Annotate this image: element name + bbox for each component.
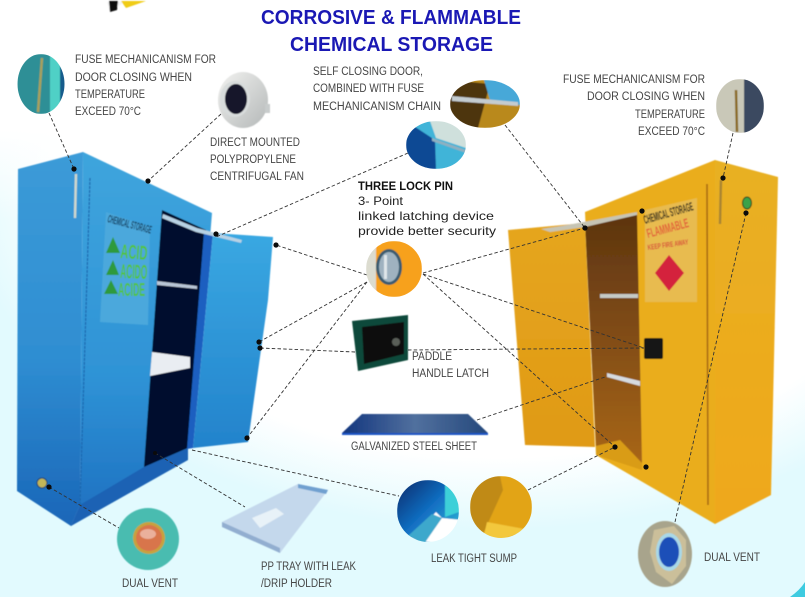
blue cabinet side [17,152,83,526]
icon: right fuse closeup [716,79,764,133]
text: right fuse mechanism: FUSE MECHANICANISM FOR [563,74,705,86]
yellow flammable cabinet [508,160,778,524]
text: pp tray: PP TRAY WITH LEAK [261,561,356,573]
icon: pp tray [222,484,328,553]
blue cabinet front [71,152,212,526]
text: fan [210,137,304,183]
icon: left dual vent [117,508,179,570]
flammable label [642,198,697,302]
text: three lock pin: 3- Point [358,194,404,208]
blue cabinet vent [37,478,47,488]
text: fan: POLYPROPYLENE [210,154,296,166]
yellow cabinet vent [742,197,752,209]
blue white shelf [150,352,190,376]
yellow sump floor [596,440,642,470]
text: self closing door: MECHANICANISM CHAIN [313,101,441,113]
text: paddle handle latch: HANDLE LATCH [412,368,489,380]
text: pp tray [261,561,356,590]
text: self closing door: COMBINED WITH FUSE [313,83,424,95]
paddle latch on yellow cabinet [644,338,663,359]
text: fan: DIRECT MOUNTED [210,137,300,149]
yellow fuse chain [720,180,721,224]
yellow closer arm [541,212,637,232]
text: paddle handle latch [412,351,489,380]
text: three lock pin: provide better security [358,224,496,238]
blue open door [193,233,273,448]
text: three lock pin: THREE LOCK PIN [358,179,453,193]
icon: galvanized steel sheet [342,414,488,435]
icon: yellow door closer closeup [450,80,520,128]
yellow open door [508,223,595,447]
yellow shelf [600,294,638,298]
text: right fuse mechanism: EXCEED 70°C [638,126,705,138]
blue door jamb [187,232,213,449]
text: self closing door: SELF CLOSING DOOR, [313,66,423,78]
blue door closer arm [162,214,242,243]
blue top shelf [157,281,197,289]
acid label: ACID [120,241,148,265]
text: three lock pin [358,179,496,238]
flammable label: FLAMMABLE [645,215,690,241]
text: left fuse mechanism: TEMPERATURE [75,89,145,101]
text: right fuse mechanism: DOOR CLOSING WHEN [587,91,705,103]
yellow lower shelf [607,373,640,386]
blue corrosive cabinet [17,152,273,526]
icon: right dual vent [638,521,692,587]
blue cabinet interior [144,210,206,467]
text: fan: CENTRIFUGAL FAN [210,171,304,183]
text: left fuse mechanism: EXCEED 70°C [75,106,141,118]
title [261,7,521,56]
yellow door seam [707,184,708,505]
text: paddle handle latch: PADDLE [412,351,452,363]
text: right fuse mechanism [563,74,705,138]
text: right dual vent: DUAL VENT [704,552,760,564]
acid label: ACIDO [120,261,148,284]
acid label [100,212,153,325]
text: pp tray: /DRIP HOLDER [261,578,332,590]
text: self closing door [313,66,441,113]
text: left fuse mechanism: FUSE MECHANICANISM FOR [75,54,216,66]
yellow cabinet side [715,160,778,524]
icon: blue door closer closeup [406,121,466,169]
cropped product at top edge [107,1,146,12]
yellow cabinet front [585,160,715,524]
icon: paddle handle latch [352,315,408,371]
text: left fuse mechanism: DOOR CLOSING WHEN [75,72,192,84]
text: right fuse mechanism: TEMPERATURE [635,109,705,121]
leader dots [46,166,749,490]
leader lines [49,113,746,528]
icon: left fuse closeup [17,54,66,114]
text: left dual vent: DUAL VENT [122,578,178,590]
door seam [80,178,90,505]
text: leak tight sump: LEAK TIGHT SUMP [431,553,517,565]
blue side fuse chain [75,174,76,218]
text: left fuse mechanism [75,54,216,118]
acid label: ACIDE [118,280,145,300]
icon: centrifugal fan [218,72,270,128]
blue cabinet plinth [71,448,188,526]
blue corrosive cabinet: CHEMICAL STORAGE [106,213,153,237]
yellow flammable cabinet: CHEMICAL STORAGE [642,199,695,227]
icon: yellow leak tight sump [470,476,532,540]
text: galvanized steel sheet: GALVANIZED STEEL SHEET [351,441,477,453]
flammable label: KEEP FIRE AWAY [647,237,689,252]
title: CHEMICAL STORAGE [290,34,493,56]
icon: lock pin closeup [366,241,422,297]
yellow cabinet interior [585,212,642,463]
title: CORROSIVE & FLAMMABLE [261,7,521,29]
icon: blue leak tight sump [397,480,462,545]
text: three lock pin: linked latching device [358,209,494,223]
